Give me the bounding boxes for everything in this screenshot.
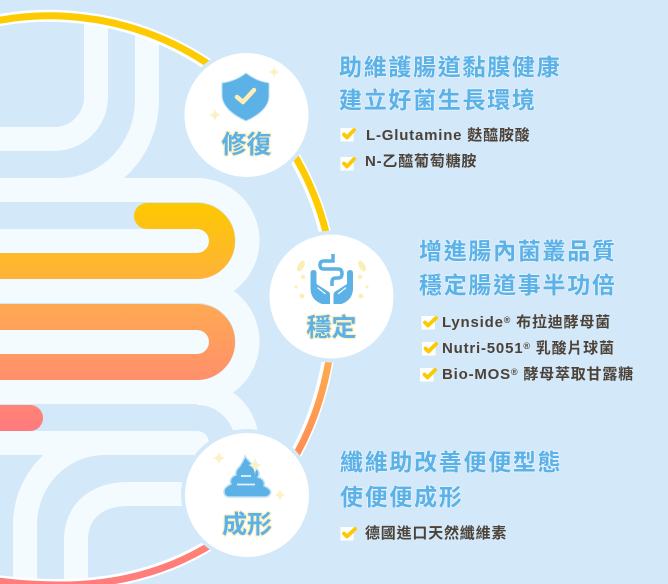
- heading: 修復: 助維護腸道黏膜健康: [339, 54, 561, 80]
- checklist: 穩定: ®: [504, 315, 511, 325]
- checklist: 穩定: ®: [511, 367, 518, 377]
- heading: 成形: 使便便成形: [340, 484, 464, 510]
- heading: 穩定: [419, 238, 617, 298]
- heading: 修復: [339, 54, 561, 113]
- node: 成形: [181, 429, 313, 561]
- icon: hands holding intestine: [294, 254, 368, 304]
- text block: 成形: [340, 449, 562, 542]
- circular ring: [0, 16, 334, 584]
- checklist: 成形: 德國進口天然纖維素: [365, 524, 507, 542]
- text block: 修復: [339, 54, 561, 170]
- intestine: white tube: [0, 10, 248, 584]
- intestine: coloured tube: [0, 216, 222, 418]
- checklist: 修復: L-Glutamine 麩醯胺酸: [366, 126, 530, 144]
- checklist: 修復: [340, 126, 530, 170]
- node: 穩定: [266, 230, 398, 362]
- checklist: 穩定: 乳酸片球菌: [531, 339, 615, 357]
- icon: stool: [212, 451, 286, 502]
- icon: shield: [208, 66, 280, 122]
- checklist: 穩定: Lynside: [442, 314, 504, 331]
- label: 修復: 修復: [221, 131, 272, 159]
- checklist: 穩定: 布拉迪酵母菌: [511, 313, 611, 331]
- label: 成形: 成形: [222, 511, 272, 539]
- heading: 穩定: 增進腸內菌叢品質: [419, 238, 617, 264]
- checklist: 穩定: Bio-MOS: [442, 366, 511, 383]
- heading: 穩定: 穩定腸道事半功倍: [419, 272, 617, 298]
- checklist: 穩定: 酵母萃取甘露糖: [518, 365, 634, 383]
- checklist: 穩定: [420, 313, 634, 383]
- heading: 成形: [340, 449, 562, 510]
- checklist: 穩定: Nutri-5051: [442, 340, 523, 357]
- heading: 成形: 纖維助改善便便型態: [340, 449, 562, 475]
- checklist: 穩定: ®: [523, 341, 531, 351]
- node: 修復: [180, 49, 312, 181]
- heading: 修復: 建立好菌生長環境: [339, 87, 537, 113]
- label: 穩定: 穩定: [306, 314, 357, 342]
- text block: 穩定: [419, 238, 634, 383]
- checklist: 修復: N-乙醯葡萄糖胺: [365, 152, 477, 170]
